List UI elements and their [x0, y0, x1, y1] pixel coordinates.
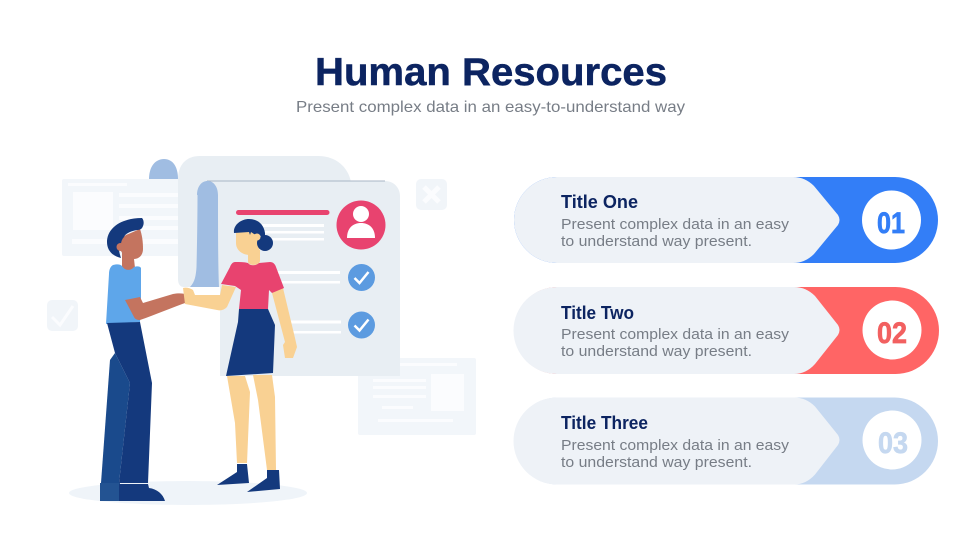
ground shadow — [69, 481, 307, 505]
right arm — [272, 288, 297, 358]
neck and head — [122, 250, 135, 271]
description — [561, 437, 790, 471]
shirt — [221, 262, 284, 309]
arm — [125, 293, 188, 320]
bun — [257, 235, 273, 251]
number badge — [862, 190, 921, 250]
text lines — [262, 224, 341, 334]
front paper — [190, 181, 400, 376]
title: Title Two — [561, 303, 634, 323]
number badge — [862, 300, 922, 360]
woman figure — [183, 219, 297, 492]
description: to understand way present. — [561, 233, 752, 250]
back paper — [149, 156, 351, 287]
pants — [101, 353, 130, 483]
left arm and hand — [183, 285, 236, 310]
icon: check two — [348, 312, 375, 338]
card three — [514, 398, 938, 484]
faded check badge — [47, 300, 78, 331]
number badge: 01 — [877, 207, 905, 240]
description — [561, 326, 790, 360]
description: Present complex data in an easy — [561, 437, 790, 454]
description: Present complex data in an easy — [561, 216, 790, 233]
man figure — [100, 218, 188, 501]
shoes — [100, 483, 120, 501]
subtitle: Present complex data in an easy-to-understand way — [296, 99, 685, 116]
shirt — [106, 264, 141, 324]
neck and face — [248, 250, 260, 265]
description: Present complex data in an easy — [561, 326, 790, 343]
number badge: 02 — [877, 317, 907, 350]
title: Title Three — [561, 413, 648, 433]
paper roll — [190, 181, 219, 287]
description: to understand way present. — [561, 343, 752, 360]
skirt — [226, 309, 275, 376]
card two — [514, 287, 939, 374]
hair — [234, 219, 265, 237]
icon: avatar badge — [336, 200, 386, 250]
title: Human Resources — [315, 51, 667, 94]
legs — [227, 376, 250, 463]
red heading bar — [236, 210, 330, 215]
number badge: 03 — [878, 427, 908, 460]
shoes — [217, 464, 249, 485]
title: Title One — [561, 192, 638, 212]
hair — [107, 218, 144, 258]
illustration: handshake over documents — [47, 156, 476, 505]
faded close badge — [416, 179, 447, 210]
card one — [514, 177, 938, 263]
description — [561, 216, 790, 250]
description: to understand way present. — [561, 454, 752, 471]
faded document bottom right — [358, 358, 476, 435]
faded document left — [62, 179, 180, 256]
number badge — [862, 410, 922, 470]
icon: check one — [348, 264, 375, 291]
